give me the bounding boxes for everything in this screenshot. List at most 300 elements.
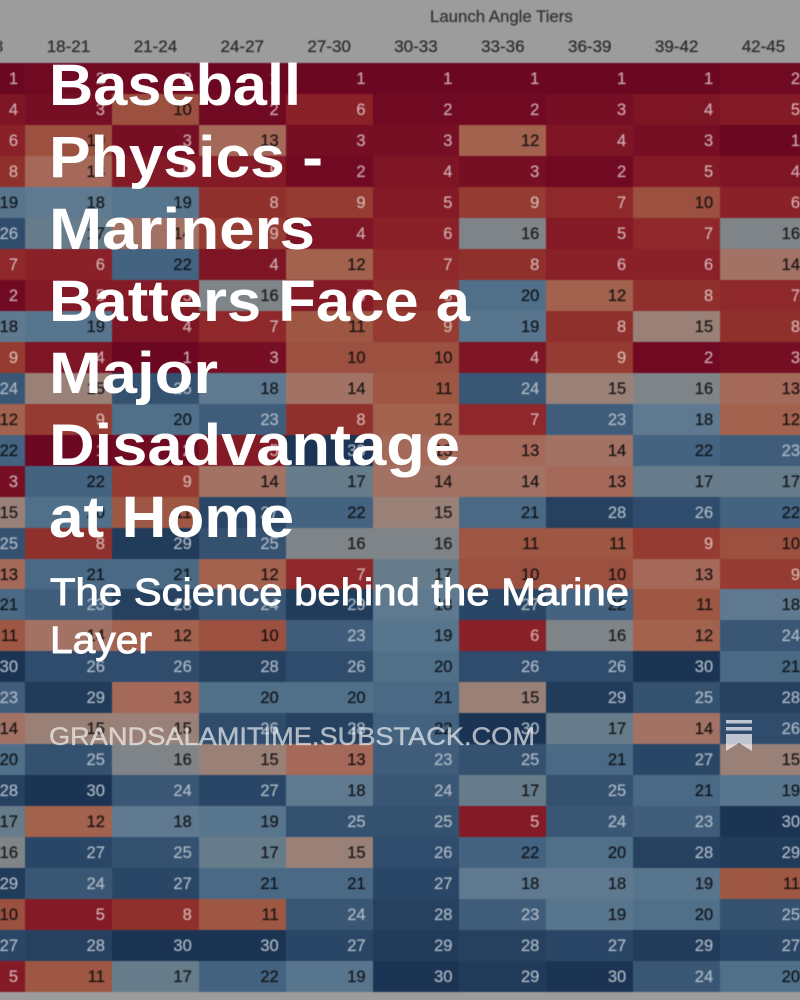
heatmap table of rankings: 17 <box>434 566 452 584</box>
title: at Home <box>49 485 294 550</box>
heatmap table of rankings: 14 <box>782 256 800 274</box>
heatmap table of rankings: 5 <box>530 813 539 831</box>
heatmap table of rankings: 13 <box>434 442 452 460</box>
column headers: 42-45 <box>742 37 785 56</box>
heatmap table of rankings: 10 <box>260 627 279 645</box>
title: Disadvantage <box>49 413 460 478</box>
heatmap table of rankings: 3 <box>617 101 626 119</box>
heatmap table of rankings: 19 <box>347 968 366 986</box>
title: Mariners <box>49 197 315 262</box>
heatmap table of rankings: 24 <box>695 968 713 986</box>
heatmap table of rankings: 15 <box>87 380 105 398</box>
heatmap table of rankings: 23 <box>87 596 105 614</box>
heatmap table of rankings: 11 <box>435 380 452 398</box>
heatmap table of rankings: 9 <box>183 473 192 491</box>
heatmap table of rankings: 13 <box>608 473 626 491</box>
heatmap table of rankings: 11 <box>522 535 539 553</box>
heatmap table of rankings: 29 <box>521 968 539 986</box>
heatmap table of rankings: 15 <box>608 380 626 398</box>
heatmap table of rankings: 15 <box>521 689 539 707</box>
heatmap table of rankings: 4 <box>530 349 539 367</box>
heatmap table of rankings: 6 <box>791 194 800 212</box>
heatmap table of rankings: 12 <box>434 411 452 429</box>
heatmap table of rankings: 1 <box>704 70 713 88</box>
heatmap table of rankings: 26 <box>434 844 452 862</box>
heatmap table of rankings: 15 <box>782 751 800 769</box>
heatmap table of rankings: 8 <box>96 535 105 553</box>
heatmap table of rankings: 10 <box>173 101 192 119</box>
heatmap table of rankings: 22 <box>521 844 539 862</box>
heatmap table of rankings: 16 <box>260 287 279 305</box>
heatmap table of rankings: 25 <box>173 844 192 862</box>
heatmap table of rankings: 2 <box>183 442 192 460</box>
heatmap table of rankings: 21 <box>695 782 713 800</box>
heatmap table of rankings: 19 <box>260 813 279 831</box>
heatmap table of rankings: 1 <box>9 70 18 88</box>
heatmap table of rankings: 11 <box>696 596 713 614</box>
column headers: 24-27 <box>220 37 264 56</box>
heatmap table of rankings: 28 <box>347 720 366 738</box>
heatmap table of rankings: 26 <box>173 658 192 676</box>
heatmap table of rankings: 5 <box>791 101 800 119</box>
heatmap table of rankings: 25 <box>260 535 279 553</box>
heatmap table of rankings: 17 <box>87 225 105 243</box>
heatmap table of rankings: 1 <box>617 70 626 88</box>
heatmap table of rankings: 21 <box>173 566 192 584</box>
heatmap table of rankings: 25 <box>347 813 366 831</box>
heatmap table of rankings: 1 <box>791 132 800 150</box>
heatmap table of rankings: 20 <box>521 287 539 305</box>
heatmap table of rankings: 8 <box>443 287 452 305</box>
heatmap table of rankings: 5 <box>617 225 626 243</box>
heatmap table of rankings: 20 <box>87 504 105 522</box>
heatmap table of rankings: 11 <box>262 906 279 924</box>
heatmap table of rankings: 4 <box>356 225 366 243</box>
heatmap table of rankings: 5 <box>704 163 713 181</box>
heatmap table of rankings: 15 <box>173 720 192 738</box>
heatmap table of rankings: 26 <box>521 658 539 676</box>
heatmap table of rankings: 20 <box>782 968 800 986</box>
heatmap table of rankings: 29 <box>695 937 713 955</box>
heatmap table of rankings: 7 <box>356 566 366 584</box>
heatmap table of rankings: 27 <box>347 937 366 955</box>
heatmap table of rankings: 28 <box>521 937 539 955</box>
publication url: GRANDSALAMITIME.SUBSTACK.COM <box>49 723 535 751</box>
heatmap table of rankings: 9 <box>356 194 366 212</box>
heatmap table of rankings: 13 <box>782 380 800 398</box>
subtitle: Layer <box>50 620 152 662</box>
heatmap table of rankings: 25 <box>173 380 192 398</box>
heatmap table of rankings: 28 <box>695 844 713 862</box>
heatmap table of rankings: 13 <box>260 132 279 150</box>
heatmap table of rankings: 8 <box>791 318 800 336</box>
heatmap table of rankings: 27 <box>260 782 279 800</box>
heatmap table of rankings: 5 <box>356 287 366 305</box>
heatmap table of rankings: 23 <box>347 627 366 645</box>
heatmap table of rankings: 29 <box>782 844 800 862</box>
heatmap table of rankings: 14 <box>695 720 713 738</box>
subtitle: The Science behind the Marine <box>50 572 629 614</box>
title: Major <box>49 341 218 406</box>
heatmap table of rankings: 29 <box>434 937 452 955</box>
column headers: 36-39 <box>568 37 611 56</box>
column headers: 39-42 <box>655 37 698 56</box>
heatmap table of rankings: 20 <box>347 689 366 707</box>
heatmap table of rankings: 11 <box>783 875 800 893</box>
heatmap table of rankings: 10 <box>0 906 18 924</box>
heatmap table of rankings: 25 <box>87 751 105 769</box>
heatmap table of rankings: 13 <box>521 442 539 460</box>
heatmap table of rankings: 15 <box>347 844 366 862</box>
heatmap table of rankings: 16 <box>521 225 539 243</box>
heatmap table of rankings: 5 <box>96 906 105 924</box>
heatmap table of rankings: 22 <box>434 720 452 738</box>
heatmap table of rankings: 30 <box>87 782 105 800</box>
heatmap table of rankings: 28 <box>608 504 626 522</box>
heatmap table of rankings: 11 <box>348 318 366 336</box>
heatmap table of rankings: 4 <box>704 101 713 119</box>
heatmap table of rankings: 30 <box>782 813 800 831</box>
heatmap table of rankings: 5 <box>96 287 105 305</box>
heatmap table of rankings: 11 <box>1 627 18 645</box>
heatmap table of rankings: 23 <box>260 411 279 429</box>
heatmap table of rankings: 26 <box>260 720 279 738</box>
heatmap table of rankings: 3 <box>530 163 539 181</box>
heatmap table of rankings: 25 <box>782 906 800 924</box>
heatmap table of rankings: 27 <box>260 504 279 522</box>
heatmap table of rankings: 13 <box>0 566 18 584</box>
heatmap table of rankings: 24 <box>782 627 800 645</box>
heatmap table of rankings: 3 <box>791 349 800 367</box>
heatmap table of rankings: 3 <box>96 101 105 119</box>
heatmap table of rankings: 6 <box>530 627 539 645</box>
heatmap table of rankings: 14 <box>173 225 192 243</box>
heatmap table of rankings: 6 <box>704 256 713 274</box>
heatmap table of rankings: 13 <box>173 689 192 707</box>
heatmap table of rankings: 2 <box>443 101 452 119</box>
heatmap table of rankings: 6 <box>96 256 105 274</box>
heatmap table of rankings: 18 <box>173 813 192 831</box>
heatmap table of rankings: 18 <box>0 318 18 336</box>
heatmap table of rankings: 4 <box>791 163 800 181</box>
heatmap table of rankings: 26 <box>695 504 713 522</box>
heatmap table of rankings: 17 <box>695 473 713 491</box>
heatmap table of rankings: 10 <box>782 535 800 553</box>
heatmap table of rankings: 1 <box>530 70 539 88</box>
heatmap table of rankings: 20 <box>695 906 713 924</box>
heatmap table of rankings: 7 <box>9 256 18 274</box>
heatmap table of rankings: 2 <box>356 163 366 181</box>
heatmap table of rankings: 12 <box>173 627 192 645</box>
heatmap table of rankings: 9 <box>96 411 105 429</box>
heatmap table of rankings: 7 <box>443 256 452 274</box>
heatmap table of rankings: 19 <box>0 194 18 212</box>
heatmap table of rankings: 14 <box>0 720 18 738</box>
heatmap table of rankings: 6 <box>9 132 18 150</box>
heatmap table of rankings: 1 <box>356 70 366 88</box>
heatmap table of rankings: 17 <box>782 473 800 491</box>
heatmap table of rankings: 25 <box>608 782 626 800</box>
heatmap table of rankings: 5 <box>9 968 18 986</box>
heatmap table of rankings: 28 <box>173 596 192 614</box>
heatmap table of rankings: 9 <box>9 349 18 367</box>
heatmap table of rankings: 24 <box>347 906 366 924</box>
heatmap table of rankings: 6 <box>443 225 452 243</box>
heatmap table of rankings: 5 <box>183 287 192 305</box>
heatmap table of rankings: 7 <box>704 225 713 243</box>
heatmap table of rankings: 1 <box>183 349 192 367</box>
heatmap table of rankings: 2 <box>269 101 279 119</box>
heatmap table of rankings: 28 <box>260 658 279 676</box>
heatmap table of rankings: 18 <box>608 875 626 893</box>
heatmap table of rankings: 3 <box>704 132 713 150</box>
heatmap table of rankings: 4 <box>96 349 105 367</box>
heatmap table of rankings: 12 <box>0 411 18 429</box>
heatmap table of rankings: 4 <box>269 256 279 274</box>
heatmap table of rankings: 9 <box>617 349 626 367</box>
heatmap table of rankings: 30 <box>695 658 713 676</box>
heatmap table of rankings: 14 <box>87 627 105 645</box>
heatmap table of rankings: 8 <box>530 256 539 274</box>
heatmap table of rankings: 12 <box>347 256 366 274</box>
heatmap table of rankings: 30 <box>521 720 539 738</box>
heatmap table of rankings: 2 <box>617 163 626 181</box>
heatmap table of rankings: 18 <box>87 194 105 212</box>
heatmap table of rankings: 27 <box>87 844 105 862</box>
heatmap table of rankings: 30 <box>260 937 279 955</box>
heatmap table of rankings: 8 <box>269 194 279 212</box>
heatmap table of rankings: 15 <box>695 318 713 336</box>
heatmap table of rankings: 21 <box>0 596 18 614</box>
heatmap table of rankings: 8 <box>356 411 366 429</box>
heatmap table of rankings: 12 <box>608 287 626 305</box>
heatmap table of rankings: 19 <box>173 194 192 212</box>
heatmap table of rankings: 12 <box>782 411 800 429</box>
heatmap table of rankings: 10 <box>608 566 626 584</box>
title: Batters Face a <box>49 269 471 334</box>
heatmap table of rankings: 5 <box>269 163 279 181</box>
heatmap table of rankings: 11 <box>88 968 105 986</box>
heatmap table of rankings: 3 <box>443 132 452 150</box>
axis heading: launch angle tiers: Launch Angle Tiers <box>430 7 573 26</box>
heatmap table of rankings: 30 <box>608 968 626 986</box>
heatmap table of rankings: 24 <box>173 782 192 800</box>
heatmap table of rankings: 23 <box>0 689 18 707</box>
heatmap table of rankings: 18 <box>434 596 452 614</box>
heatmap table of rankings: 17 <box>521 782 539 800</box>
heatmap table of rankings: 25 <box>434 813 452 831</box>
heatmap table of rankings: 7 <box>269 318 279 336</box>
heatmap table of rankings: 18 <box>260 380 279 398</box>
heatmap table of rankings: 21 <box>347 875 366 893</box>
heatmap table of rankings: 29 <box>347 596 366 614</box>
heatmap table of rankings: 21 <box>434 689 452 707</box>
heatmap table of rankings: 24 <box>87 875 105 893</box>
heatmap table of rankings: 11 <box>609 535 626 553</box>
heatmap table of rankings: 16 <box>173 751 192 769</box>
heatmap table of rankings: 10 <box>434 349 452 367</box>
heatmap table of rankings: 27 <box>173 875 192 893</box>
heatmap table of rankings: 21 <box>260 875 279 893</box>
heatmap table of rankings: 19 <box>782 782 800 800</box>
heatmap table of rankings: 26 <box>782 720 800 738</box>
heatmap table of rankings: 5 <box>443 194 452 212</box>
heatmap table of rankings: 14 <box>434 473 452 491</box>
heatmap table of rankings: 24 <box>260 596 279 614</box>
title: Baseball <box>49 53 301 118</box>
title <box>49 53 471 550</box>
heatmap table of rankings: 12 <box>260 566 279 584</box>
heatmap table of rankings: 13 <box>87 163 105 181</box>
heatmap table of rankings: 24 <box>608 813 626 831</box>
heatmap table of rankings: 14 <box>260 473 279 491</box>
heatmap table of rankings: 10 <box>347 349 366 367</box>
heatmap table of rankings: 30 <box>434 968 452 986</box>
heatmap table of rankings: 1 <box>96 442 105 460</box>
heatmap table of rankings: 4 <box>443 163 452 181</box>
heatmap table of rankings: 3 <box>356 132 366 150</box>
heatmap table of rankings: 27 <box>0 937 18 955</box>
heatmap table of rankings: 11 <box>175 504 192 522</box>
heatmap table of rankings: 1 <box>443 70 452 88</box>
heatmap table of rankings: 27 <box>608 937 626 955</box>
heatmap table of rankings: 25 <box>0 535 18 553</box>
heatmap table of rankings: 12 <box>87 813 105 831</box>
subtitle <box>50 572 629 662</box>
heatmap table of rankings: 9 <box>269 225 279 243</box>
heatmap table of rankings: 6 <box>617 256 626 274</box>
heatmap table of rankings: 1 <box>269 70 279 88</box>
heatmap table of rankings: 22 <box>173 256 192 274</box>
heatmap table of rankings: 24 <box>434 782 452 800</box>
heatmap table of rankings: 7 <box>791 287 800 305</box>
heatmap table of rankings: 28 <box>434 906 452 924</box>
heatmap table of rankings: 16 <box>0 844 18 862</box>
heatmap table of rankings: 23 <box>782 442 800 460</box>
column headers: 33-36 <box>481 37 525 56</box>
heatmap table of rankings: 2 <box>183 70 192 88</box>
column headers: 27-30 <box>307 37 351 56</box>
heatmap table of rankings: 23 <box>521 906 539 924</box>
heatmap table of rankings: 27 <box>521 596 539 614</box>
heatmap table of rankings: 17 <box>173 968 192 986</box>
heatmap table of rankings: 25 <box>521 751 539 769</box>
heatmap table of rankings: 16 <box>782 225 800 243</box>
heatmap table of rankings: 22 <box>0 442 18 460</box>
heatmap table of rankings: 24 <box>521 380 539 398</box>
heatmap table of rankings: 3 <box>9 473 18 491</box>
heatmap table of rankings: 8 <box>704 287 713 305</box>
heatmap table of rankings: 22 <box>782 504 800 522</box>
heatmap table of rankings: 13 <box>347 751 366 769</box>
heatmap table of rankings: 22 <box>260 968 279 986</box>
heatmap table of rankings: 2 <box>9 287 18 305</box>
heatmap table of rankings: 26 <box>87 658 105 676</box>
heatmap table of rankings: 17 <box>347 473 366 491</box>
heatmap table of rankings: 4 <box>617 132 626 150</box>
heatmap table of rankings: 15 <box>434 504 452 522</box>
heatmap table of rankings: 10 <box>695 194 713 212</box>
column headers: 21-24 <box>134 37 177 56</box>
heatmap table of rankings: 17 <box>0 813 18 831</box>
heatmap table of rankings: 27 <box>782 937 800 955</box>
heatmap table of rankings: 20 <box>434 658 452 676</box>
heatmap table of rankings: 8 <box>183 906 192 924</box>
heatmap table of rankings: 16 <box>347 535 366 553</box>
heatmap table of rankings: 28 <box>782 689 800 707</box>
heatmap table of rankings: 21 <box>608 751 626 769</box>
heatmap table of rankings: 16 <box>608 627 626 645</box>
heatmap table of rankings: 14 <box>521 473 539 491</box>
heatmap table of rankings: 20 <box>173 411 192 429</box>
heatmap table of rankings: 18 <box>695 411 713 429</box>
heatmap table of rankings: 30 <box>0 658 18 676</box>
heatmap table of rankings: 22 <box>87 473 105 491</box>
heatmap table of rankings: 29 <box>173 535 192 553</box>
heatmap table of rankings: 2 <box>96 70 105 88</box>
heatmap table of rankings: 15 <box>260 751 279 769</box>
column headers: 18-21 <box>47 37 90 56</box>
heatmap table of rankings: 14 <box>608 442 626 460</box>
heatmap table of rankings: 8 <box>9 163 18 181</box>
heatmap table of rankings: 2 <box>704 349 713 367</box>
heatmap table of rankings: 26 <box>0 225 18 243</box>
heatmap table of rankings: 18 <box>521 875 539 893</box>
heatmap table of rankings: 20 <box>260 689 279 707</box>
column headers: 30-33 <box>394 37 438 56</box>
heatmap table of rankings: 15 <box>0 504 18 522</box>
heatmap table of rankings: 19 <box>434 627 452 645</box>
heatmap table of rankings: 27 <box>695 751 713 769</box>
heatmap table of rankings: 2 <box>791 70 800 88</box>
heatmap table of rankings: 4 <box>9 101 18 119</box>
heatmap table of rankings: 7 <box>617 194 626 212</box>
heatmap table of rankings: 6 <box>356 101 366 119</box>
heatmap table of rankings: 18 <box>782 596 800 614</box>
heatmap table of rankings: 29 <box>608 689 626 707</box>
heatmap table of rankings: 21 <box>87 566 105 584</box>
heatmap table of rankings: 5 <box>183 163 192 181</box>
heatmap table of rankings: 19 <box>695 875 713 893</box>
heatmap table of rankings: 19 <box>521 318 539 336</box>
title: Physics - <box>49 125 323 190</box>
heatmap table of rankings: 12 <box>695 627 713 645</box>
heatmap table of rankings: 20 <box>608 844 626 862</box>
heatmap table of rankings: 21 <box>521 504 539 522</box>
heatmap table of rankings: 23 <box>434 751 452 769</box>
icon: bookmark <box>726 720 752 751</box>
heatmap table of rankings: 9 <box>443 318 452 336</box>
heatmap table of rankings: 4 <box>183 318 192 336</box>
heatmap table of rankings: 3 <box>183 132 192 150</box>
heatmap table of rankings: 16 <box>695 380 713 398</box>
heatmap table of rankings: 19 <box>608 906 626 924</box>
heatmap table of rankings: 23 <box>695 813 713 831</box>
heatmap table of rankings: 13 <box>695 566 713 584</box>
heatmap table of rankings: 30 <box>173 937 192 955</box>
heatmap table of rankings: 8 <box>617 318 626 336</box>
heatmap table of rankings: 22 <box>695 442 713 460</box>
heatmap table of rankings: 22 <box>608 596 626 614</box>
heatmap table of rankings: 29 <box>87 689 105 707</box>
heatmap table of rankings: 28 <box>0 782 18 800</box>
heatmap table of rankings: 9 <box>704 535 713 553</box>
heatmap table of rankings: 18 <box>347 782 366 800</box>
heatmap table of rankings: 3 <box>269 349 279 367</box>
column headers <box>0 37 786 56</box>
heatmap table of rankings: 21 <box>782 658 800 676</box>
heatmap table of rankings: 7 <box>530 411 539 429</box>
